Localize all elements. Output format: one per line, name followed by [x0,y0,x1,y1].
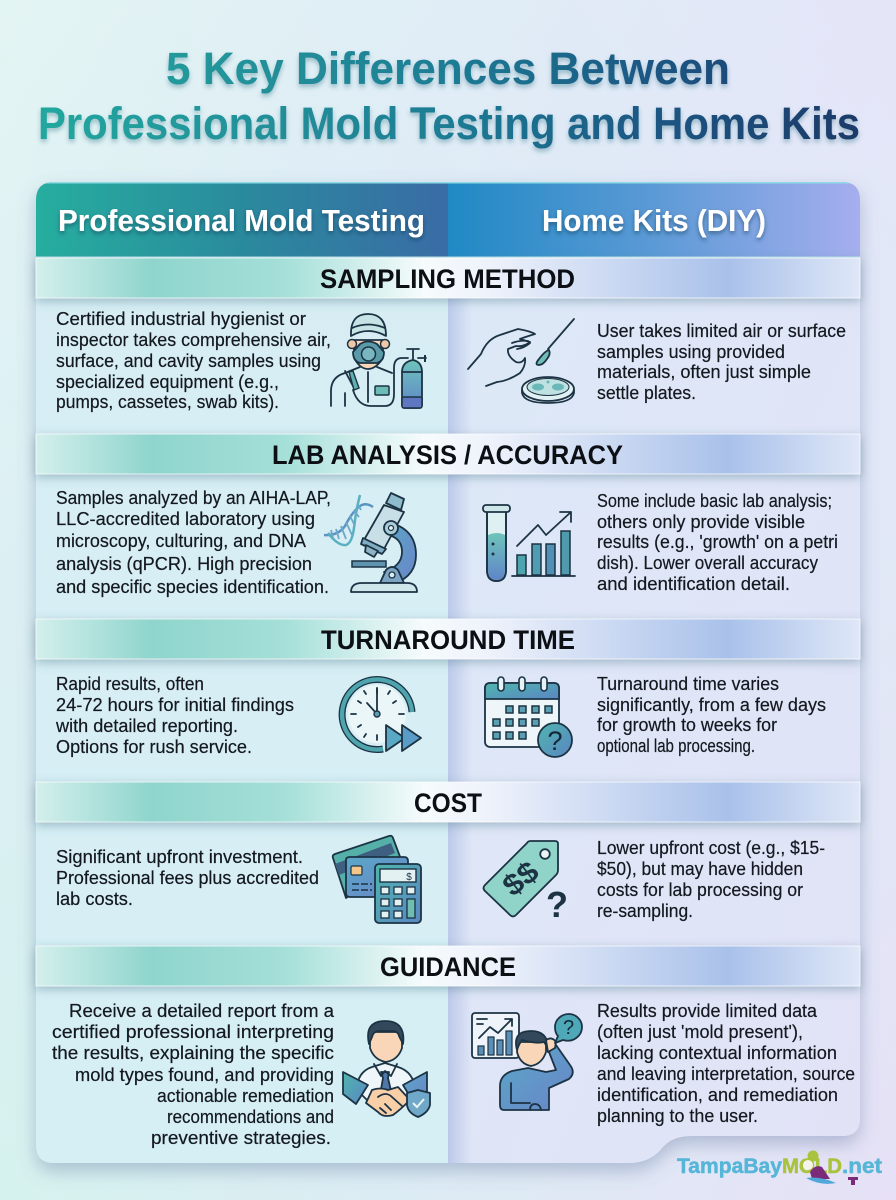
text: home kit cost: $50), but may have hidden [597,859,803,879]
text: home kit cost: Lower upfront cost (e.g., $15- [597,838,825,858]
text: home kit cost: re-sampling. [597,901,693,921]
text: home kit guidance: identification, and remediation [597,1085,838,1105]
icon: inspector with respirator and tank [331,314,426,408]
text: professional lab analysis: and specific species identification. [56,577,329,597]
text: professional turnaround: 24-72 hours for initial findings [56,695,294,715]
text: professional guidance: preventive strategies. [151,1128,331,1148]
text: home kit turnaround [597,674,826,756]
text: home kit guidance: Results provide limited data [597,1001,818,1021]
text: professional sampling: pumps, cassetes, swab kits). [56,392,279,412]
text: professional turnaround: with detailed reporting. [55,716,238,736]
text: professional sampling: specialized equipment (e.g., [56,372,279,392]
text: professional cost [56,847,319,909]
text: professional guidance: actionable remediation [157,1086,334,1106]
text: home kit guidance: and leaving interpretation, source [597,1064,855,1084]
text: home kit sampling: settle plates. [597,383,696,403]
text: professional turnaround: Options for rush service. [56,737,252,757]
icon: dna and microscope [324,493,417,592]
text: home kit lab analysis: results (e.g., 'growth' on a petri [597,532,838,552]
text: professional cost: lab costs. [56,889,133,909]
text: professional cost: Significant upfront investment. [56,847,303,867]
title: 5 Key Differences Between [166,43,730,94]
text: professional guidance [52,1001,335,1148]
band: sampling method: SAMPLING METHOD [320,264,575,294]
logo: TampaBayMOLD.net [677,1150,882,1185]
icon: clock with fast-forward [342,680,421,751]
band: turnaround time [36,619,860,659]
logo: TampaBayMOLD.net: .net [842,1155,882,1178]
text: home kit lab analysis: Some include basic lab analysis; [597,491,832,511]
text: home kit turnaround: significantly, from a few days [597,695,826,715]
text: professional lab analysis [56,488,331,597]
text: professional sampling [56,309,331,412]
text: home kit lab analysis: and identification detail. [597,574,790,594]
icon: confused user with chart: ? [563,1017,574,1039]
text: home kit turnaround: for growth to weeks for [597,715,777,735]
text: professional guidance: Receive a detailed report from a [69,1001,335,1021]
text: home kit cost: costs for lab processing or [597,880,803,900]
text: professional sampling: inspector takes comprehensive air, [56,330,331,350]
title [38,43,860,149]
text: home kit guidance: (often just 'mold present'), [597,1022,803,1042]
icon: calendar with question mark [485,677,572,757]
icon: credit cards and calculator: $ [406,872,412,883]
text: home kit guidance [597,1001,855,1126]
logo: TampaBayMOLD.net: TampaBay [677,1155,782,1178]
band: guidance [36,946,860,986]
icon: calendar with question mark: ? [547,726,563,756]
text: home kit cost [597,838,825,921]
band: guidance: GUIDANCE [380,952,516,982]
band: sampling method [36,258,860,298]
text: professional cost: Professional fees plus accredited [56,868,319,888]
band: turnaround time: TURNAROUND TIME [321,625,575,655]
text: professional lab analysis: Samples analyzed by an AIHA-LAP, [56,488,331,508]
header: professional mold testing: Professional Mold Testing [58,203,425,238]
logo: TampaBayMOLD.net: MOLD [782,1155,842,1178]
text: professional turnaround [55,674,294,757]
text: professional turnaround: Rapid results, often [56,674,204,694]
title: Professional Mold Testing and Home Kits [38,98,860,149]
text: professional lab analysis: microscopy, culturing, and DNA [56,531,306,551]
column headers [36,182,860,258]
band: cost: COST [414,788,482,818]
text: home kit sampling: materials, often just simple [597,362,811,382]
band: lab analysis [36,434,860,474]
band: lab analysis: LAB ANALYSIS / ACCURACY [272,440,623,470]
text: professional guidance: certified professional interpreting [52,1022,334,1042]
icon: professional handshake [343,1021,430,1117]
text: home kit lab analysis [597,491,838,594]
icon: price tag with question mark: $$ [497,855,546,903]
text: home kit guidance: planning to the user. [597,1106,758,1126]
icon: credit cards and calculator [333,836,421,923]
text: professional sampling: surface, and cavity samples using [56,351,321,371]
header: home kits: Home Kits (DIY) [542,203,766,238]
icon: price tag with question mark: ? [546,884,568,925]
band: cost [36,782,860,822]
icon: test tube and rising chart [483,505,575,581]
comparison table panel [36,182,860,1172]
text: home kit lab analysis: dish). Lower overall accuracy [597,553,818,573]
text: professional lab analysis: LLC-accredited laboratory using [56,509,315,529]
text: professional guidance: the results, explaining the specific [52,1043,334,1063]
text: home kit sampling [597,321,846,403]
text: home kit lab analysis: others only provide visible [597,512,805,532]
text: professional sampling: Certified industrial hygienist or [56,309,306,329]
text: home kit turnaround: optional lab processing. [597,736,755,756]
text: home kit sampling: User takes limited air or surface [597,321,846,341]
icon: price tag with question mark [484,841,568,925]
text: professional lab analysis: analysis (qPCR). High precision [56,554,312,574]
icon: confused user with chart [472,1013,582,1110]
text: professional guidance: recommendations and [167,1107,334,1127]
text: home kit turnaround: Turnaround time varies [597,674,779,694]
text: home kit sampling: samples using provided [597,342,785,362]
icon: hand with swab and petri dish [468,319,574,403]
text: home kit guidance: lacking contextual information [597,1043,837,1063]
text: professional guidance: mold types found, and providing [75,1065,334,1085]
